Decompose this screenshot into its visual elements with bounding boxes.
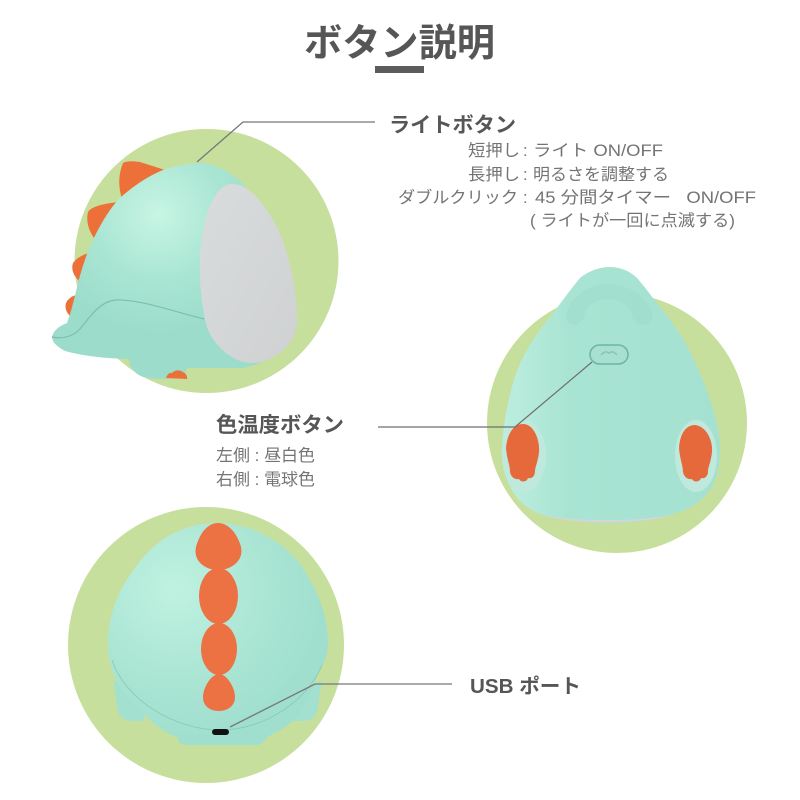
body seam bbox=[52, 300, 204, 338]
toe bbox=[166, 370, 187, 379]
green circle background bbox=[487, 293, 747, 553]
power button bbox=[590, 345, 628, 364]
panel: underside view lamp with colour temperature button bbox=[487, 267, 747, 553]
text block: light button instructions: ( ライトが一回に点滅する) bbox=[530, 211, 735, 230]
title: ボタン説明 bbox=[304, 23, 495, 65]
lens edge bbox=[540, 514, 673, 522]
USB port bbox=[212, 729, 229, 735]
heading: USB port: USB ポート bbox=[470, 675, 581, 698]
text block: light button instructions: : bbox=[523, 189, 528, 207]
text block: light button instructions: 短押し bbox=[468, 141, 520, 160]
text block: colour temperature details: 左側 : 昼白色 bbox=[216, 446, 315, 465]
heading: colour temperature button: 色温度ボタン bbox=[216, 414, 344, 437]
text block: light button instructions bbox=[398, 141, 756, 230]
right foot bbox=[679, 425, 712, 482]
left foot halo bbox=[502, 420, 546, 492]
body seam bbox=[112, 660, 322, 730]
text block: light button instructions: 明るさを調整する bbox=[533, 165, 669, 184]
panel: side view lamp with light button bbox=[52, 129, 338, 393]
text block: light button instructions: : bbox=[523, 142, 528, 160]
dinosaur body bbox=[52, 163, 290, 379]
dorsal beads bbox=[196, 523, 241, 711]
text block: colour temperature details bbox=[216, 446, 315, 489]
heading: light button: ライトボタン bbox=[389, 114, 516, 137]
dinosaur body back bbox=[108, 523, 328, 745]
right foot bbox=[285, 680, 322, 721]
leader line: USB port bbox=[230, 684, 452, 727]
green circle background bbox=[68, 507, 344, 783]
leader line: light button bbox=[197, 122, 375, 162]
leader line: colour temperature button bbox=[378, 362, 592, 427]
text block: light button instructions: 45 分間タイマー ON/OFF bbox=[535, 188, 756, 207]
text block: light button instructions: : bbox=[523, 166, 528, 184]
text block: colour temperature details: 右側 : 電球色 bbox=[216, 470, 315, 489]
front lens bbox=[200, 184, 297, 363]
green circle background bbox=[74, 129, 338, 393]
dorsal spikes bbox=[66, 161, 165, 316]
left foot bbox=[506, 424, 539, 482]
dinosaur body underside bbox=[502, 267, 720, 523]
text block: light button instructions: ダブルクリック bbox=[398, 187, 518, 207]
text block: light button instructions: 長押し bbox=[468, 165, 520, 184]
embossed head recess bbox=[566, 284, 653, 325]
left foot bbox=[113, 680, 150, 721]
text block: light button instructions: ライト ON/OFF bbox=[533, 142, 663, 160]
panel: back view lamp with USB port bbox=[68, 507, 344, 783]
right foot halo bbox=[675, 420, 717, 492]
